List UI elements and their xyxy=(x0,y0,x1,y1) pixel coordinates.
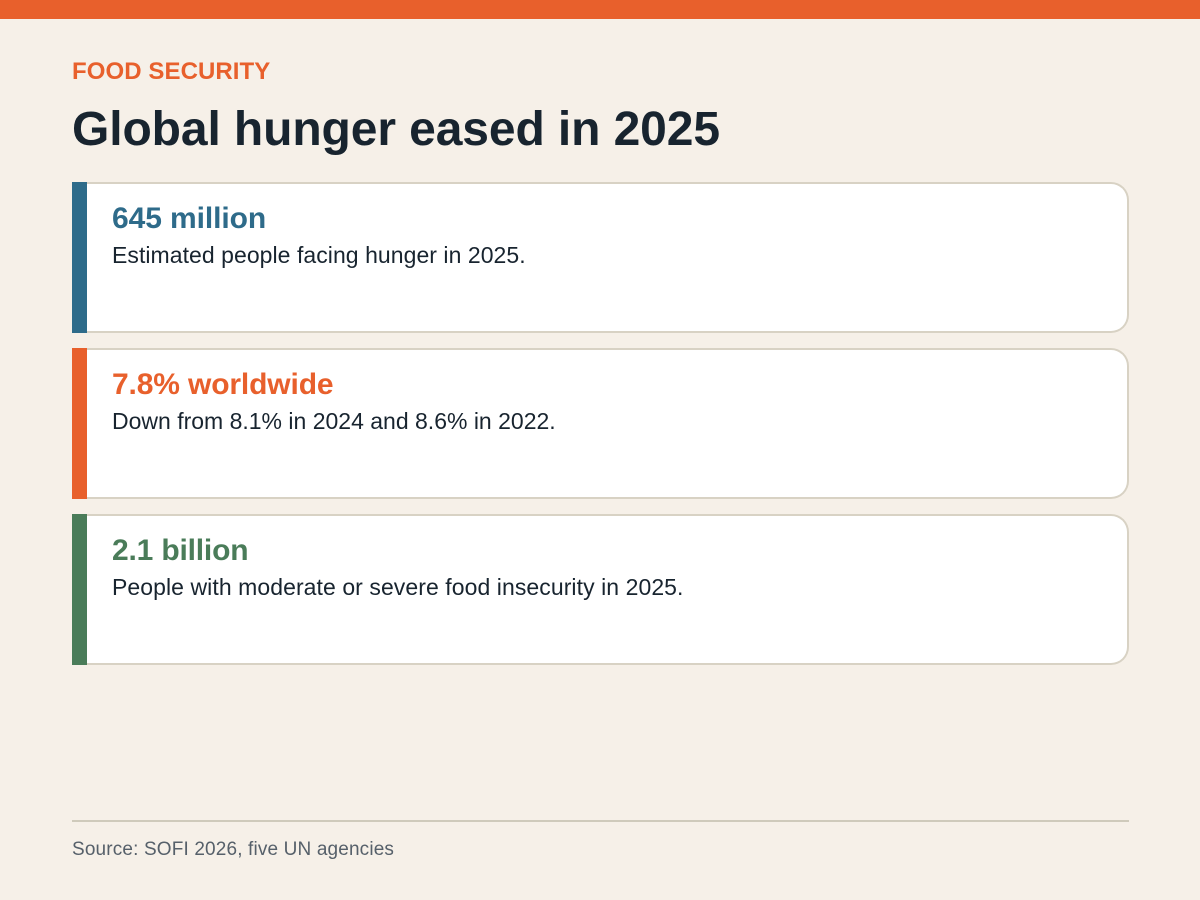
source note: Source: SOFI 2026, five UN agencies xyxy=(72,839,394,860)
top accent bar xyxy=(0,0,1200,19)
title: Global hunger eased in 2025 xyxy=(72,103,720,156)
stat: 645 million: 645 million xyxy=(112,202,266,235)
description: food insecurity: People with moderate or severe food insecurity in 2025. xyxy=(112,574,684,600)
panel: 7.8% worldwide xyxy=(72,348,1129,499)
panel: 2.1 billion xyxy=(72,514,1129,665)
panel: 645 million xyxy=(72,182,1129,333)
stat: 2.1 billion: 2.1 billion xyxy=(112,534,248,567)
stat: 7.8% worldwide: 7.8% worldwide xyxy=(112,368,333,401)
kicker: FOOD SECURITY xyxy=(72,58,270,85)
description: people facing hunger: Estimated people facing hunger in 2025. xyxy=(112,242,526,268)
accent bar: blue xyxy=(72,182,87,333)
description: prevalence trend: Down from 8.1% in 2024 and 8.6% in 2022. xyxy=(112,408,556,434)
accent bar: green xyxy=(72,514,87,665)
accent bar: orange xyxy=(72,348,87,499)
